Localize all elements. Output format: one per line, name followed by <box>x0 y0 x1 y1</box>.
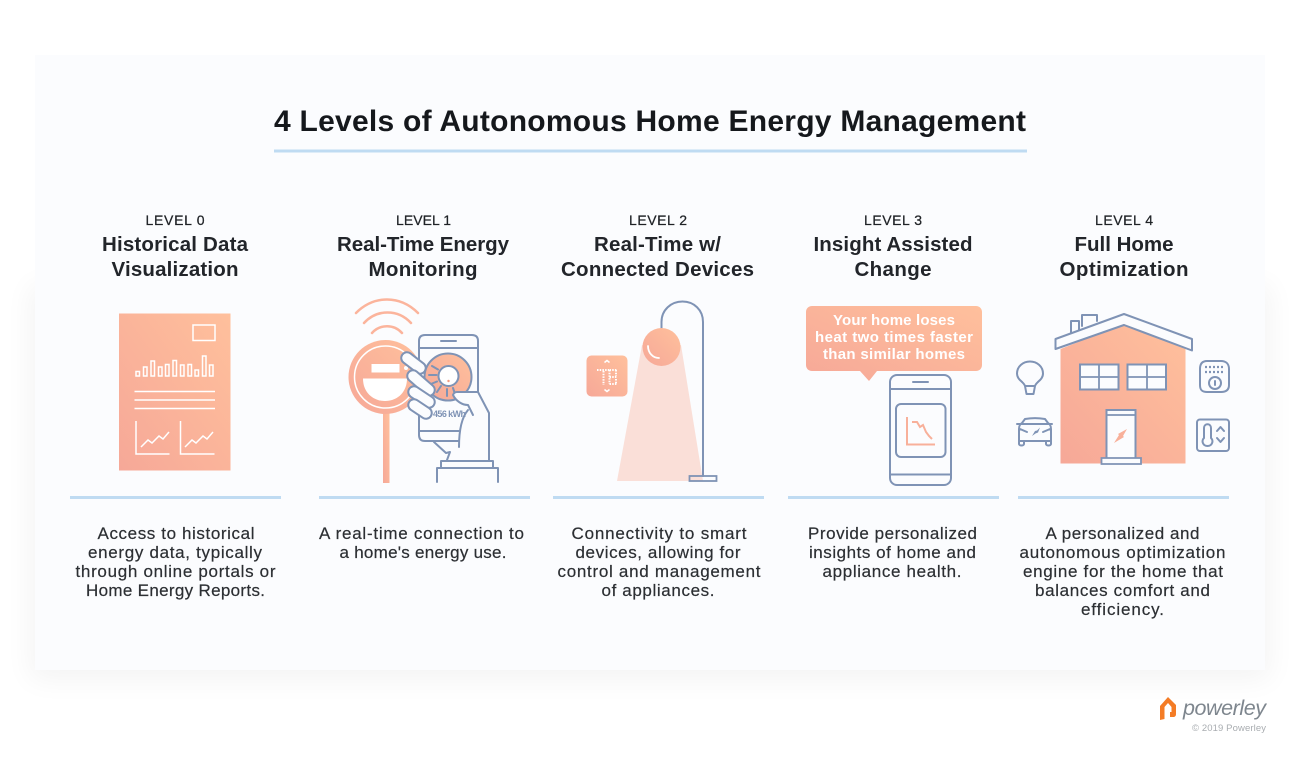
icon: insight speech bubble and phone: than similar homes <box>823 346 965 363</box>
icon: insight speech bubble and phone: Your home loses <box>833 312 955 329</box>
column: level 0 heading: LEVEL 0 <box>146 212 205 228</box>
column: level 3 heading: LEVEL 3 <box>864 212 922 228</box>
description: level 2: control and management <box>558 562 761 581</box>
column: level 2 heading: Connected Devices <box>561 258 754 281</box>
description: level 4: A personalized and <box>1046 524 1200 543</box>
description: level 0 <box>76 524 276 600</box>
column: level 2 heading: Real-Time w/ <box>594 233 721 256</box>
column: level 0 heading <box>102 212 249 281</box>
column: level 2 heading: LEVEL 2 <box>629 212 687 228</box>
description: level 0: Home Energy Reports. <box>86 581 265 600</box>
column: level 4 heading: LEVEL 4 <box>1095 212 1153 228</box>
title: 4 Levels of Autonomous Home Energy Management <box>274 105 1026 138</box>
hand <box>434 392 489 460</box>
icon: smart home with devices <box>1017 314 1229 464</box>
icon: electric car <box>1017 418 1052 446</box>
description: level 4: efficiency. <box>1081 600 1164 619</box>
description: level 1: a home's energy use. <box>340 543 506 562</box>
copyright: © 2019 Powerley <box>1192 723 1266 734</box>
logo: powerley: powerley <box>1182 696 1267 720</box>
icon: insight speech bubble and phone <box>806 306 982 485</box>
description: level 4: balances comfort and <box>1035 581 1210 600</box>
column: level 4 heading: Full Home <box>1074 233 1174 256</box>
column: level 3 heading: Insight Assisted <box>814 233 972 256</box>
description: level 0: through online portals or <box>76 562 276 581</box>
icon: energy report document <box>119 314 230 470</box>
icon: insight speech bubble and phone: heat two times faster <box>815 329 973 346</box>
description: level 0: energy data, typically <box>88 543 262 562</box>
description: level 3: insights of home and <box>809 543 976 562</box>
column: level 3 heading: Change <box>854 258 932 281</box>
description: level 1: A real-time connection to <box>319 524 524 543</box>
column: level 1 heading: Monitoring <box>368 258 478 281</box>
icon: smart meter and phone in hand: 456 kWh <box>433 409 466 419</box>
icon: smart lock <box>1200 361 1229 392</box>
column: level 1 heading: Real-Time Energy <box>337 233 510 256</box>
description: level 2 <box>558 524 761 600</box>
description: level 2: devices, allowing for <box>576 543 741 562</box>
column: level 0 heading: Visualization <box>112 258 238 281</box>
panel shadow <box>30 285 1270 680</box>
column: level 2 heading <box>561 212 754 281</box>
column: level 1 heading <box>337 212 510 281</box>
description: level 4: engine for the home that <box>1023 562 1223 581</box>
description: level 0: Access to historical <box>98 524 254 543</box>
description: level 1 <box>319 524 524 562</box>
description: level 4 <box>1020 524 1226 619</box>
icon: smart meter and phone in hand <box>348 300 498 483</box>
description: level 3: appliance health. <box>822 562 962 581</box>
column: level 3 heading <box>814 212 972 281</box>
column dividers <box>70 496 1229 499</box>
column: level 1 heading: LEVEL 1 <box>396 212 451 228</box>
title <box>274 105 1027 152</box>
description: level 2: of appliances. <box>602 581 714 600</box>
column: level 4 heading: Optimization <box>1060 258 1188 281</box>
column: level 4 heading <box>1060 212 1188 281</box>
fingers <box>407 358 429 413</box>
icon: thermostat <box>1197 420 1229 451</box>
icon: light bulb <box>1017 362 1043 394</box>
description: level 3: Provide personalized <box>808 524 977 543</box>
icon: connected lamp and thermostat <box>586 302 716 481</box>
main panel <box>35 55 1265 670</box>
column: level 0 heading: Historical Data <box>102 233 249 256</box>
description: level 2: Connectivity to smart <box>572 524 747 543</box>
description: level 4: autonomous optimization <box>1020 543 1226 562</box>
description: level 3 <box>808 524 977 581</box>
